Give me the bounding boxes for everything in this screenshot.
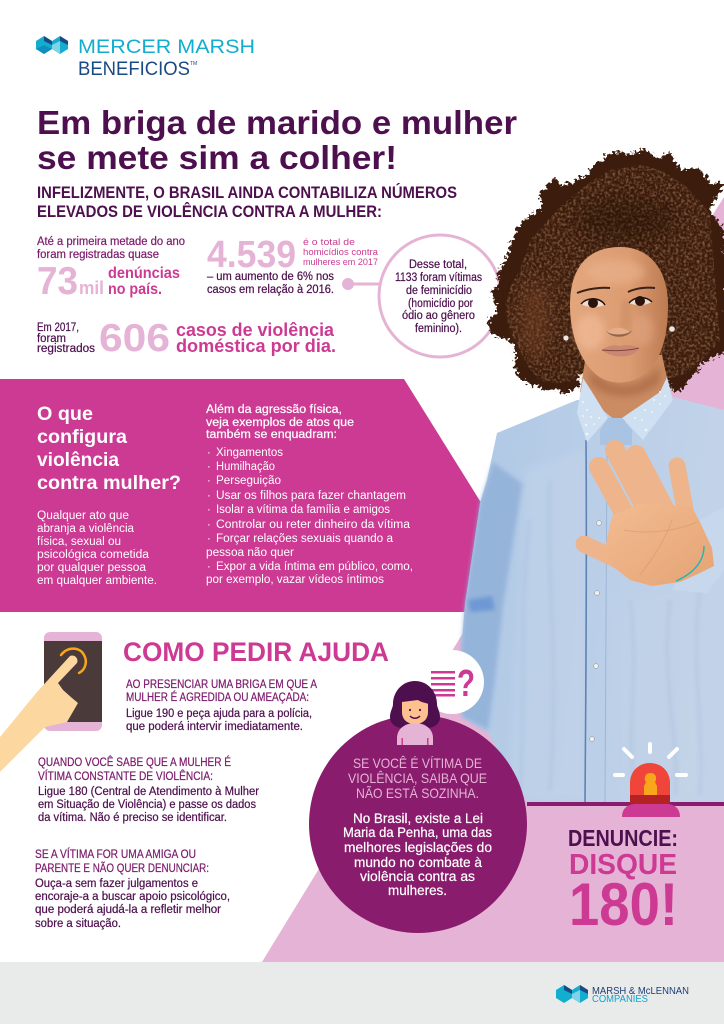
earrings [669, 326, 675, 332]
stat: 73 mil denuncias: mil [79, 278, 104, 298]
band list of abusive acts: · [207, 561, 211, 573]
help block: constant victim: VÍTIMA CONSTANTE DE VIOLÊNCIA: [38, 770, 213, 783]
stat: 4.539 homicidios: homicídios contra [303, 247, 379, 258]
purple circle panel: you are not alone: No Brasil, existe a Lei [353, 811, 483, 826]
band list of abusive acts [206, 447, 413, 586]
band list of abusive acts: pessoa não quer [206, 547, 294, 559]
purple circle panel: you are not alone: NÃO ESTÁ SOZINHA. [356, 785, 479, 801]
speech bubble with question mark [420, 650, 484, 714]
stat: 4.539 homicidios: é o total de [303, 237, 355, 248]
band list of abusive acts: Humilhação [216, 461, 275, 473]
stat: 4.539 homicidios [207, 234, 379, 296]
band list of abusive acts: · [207, 490, 211, 502]
band paragraph: abranja a violência [37, 523, 135, 535]
band list of abusive acts: · [207, 504, 211, 516]
band heading: O que configura violencia: contra mulher? [37, 472, 181, 494]
help block: constant victim: da vítima. Não é preciso se identificar. [38, 812, 227, 824]
band list intro: veja exemplos de atos que [206, 417, 354, 429]
stat: 4.539 homicidios: mulheres em 2017 [303, 257, 378, 268]
help block: friend or relative: sobre a situação. [35, 918, 121, 930]
help block: constant victim: Ligue 180 (Central de Atendimento à Mulher [38, 786, 259, 798]
logo: Mercer Marsh Beneficios [36, 36, 255, 80]
photo: woman making stop gesture [461, 149, 724, 802]
band list intro: também se enquadram: [206, 429, 337, 441]
help block: constant victim [38, 756, 259, 824]
call to action: denuncie disque 180: 180! [569, 871, 678, 938]
band list of abusive acts: Forçar relações sexuais quando a [216, 533, 394, 545]
stat: 73 mil denuncias: no país. [108, 281, 162, 298]
band list intro: Além da agressão física, [206, 404, 342, 416]
raised sleeve [672, 582, 704, 592]
siren icon [615, 744, 686, 817]
stat: 4.539 homicidios: – um aumento de 6% nos [207, 271, 334, 283]
help block: friend or relative: encoraje-a a buscar apoio psicológico, [35, 891, 230, 903]
help block: friend or relative [35, 848, 230, 930]
pink triangle behind woman's head [640, 197, 724, 410]
stat: 4.539 homicidios: casos em relação à 2016. [207, 284, 334, 296]
footer logo: Marsh & McLennan Companies [556, 985, 689, 1005]
stat: 606 casos: 606 [99, 317, 170, 360]
call to action: denuncie disque 180 [568, 825, 678, 938]
eyes [581, 296, 652, 308]
callout circle: feminicidio: ódio ao gênero [402, 310, 475, 322]
callout circle: feminicidio: de feminicídio [406, 285, 472, 297]
collar [577, 377, 673, 445]
call to action: denuncie disque 180: DISQUE [569, 849, 677, 881]
callout circle: feminicidio: (homicídio por [408, 298, 473, 310]
band list of abusive acts: Xingamentos [216, 447, 283, 459]
subtitle [37, 183, 457, 221]
band list of abusive acts: Isolar a vítima da família e amigos [216, 504, 390, 516]
stat: 73 mil denuncias: 73 [37, 260, 78, 303]
heading: como pedir ajuda: COMO PEDIR AJUDA [123, 637, 389, 667]
help block: constant victim: em Situação de Violência) e passe os dados [38, 799, 256, 811]
logo: Mercer Marsh Beneficios: MERCER MARSH [78, 37, 255, 58]
subtitle: ELEVADOS DE VIOLÊNCIA CONTRA A MULHER: [37, 202, 382, 221]
callout circle: feminicidio: feminino). [415, 323, 462, 335]
stat: 73 mil denuncias: foram registradas quase [37, 249, 159, 261]
logo: Mercer Marsh Beneficios: BENEFICIOS [78, 58, 190, 80]
band paragraph: Qualquer ato que [37, 510, 129, 522]
phone icon with pointing hand [0, 632, 102, 772]
purple circle panel: you are not alone: Maria da Penha, uma das [343, 825, 492, 840]
footer logo: Marsh & McLennan Companies: COMPANIES [592, 994, 648, 1005]
band list of abusive acts: · [207, 461, 211, 473]
footer logo: Marsh & McLennan Companies: MARSH & McLENNAN [592, 986, 689, 997]
band paragraph: em qualquer ambiente. [37, 575, 157, 587]
eyebrows [577, 288, 655, 293]
band heading: O que configura violencia: O que [37, 403, 93, 425]
band list of abusive acts: · [207, 519, 211, 531]
purple circle panel: you are not alone: VIOLÊNCIA, SAIBA QUE [348, 770, 487, 786]
band heading: O que configura violencia: violência [37, 449, 119, 471]
speech bubble with question mark: ? [457, 663, 475, 705]
purple circle panel: you are not alone: violência contra as [360, 869, 475, 884]
stat: 73 mil denuncias: Até a primeira metade do ano [37, 236, 185, 248]
help block: friend or relative: que poderá ajudá-la a refletir melhor [35, 904, 221, 916]
purple circle panel: you are not alone: mulheres. [388, 883, 447, 898]
neck [580, 355, 673, 424]
callout circle: feminicidio [379, 235, 501, 357]
title [37, 105, 517, 177]
shirt [461, 397, 724, 802]
magenta band: what is violence [0, 379, 490, 612]
help block: witnessing a fight: AO PRESENCIAR UMA BRIGA EM QUE A [126, 679, 317, 691]
band list of abusive acts: · [207, 447, 211, 459]
band list of abusive acts: · [207, 533, 211, 545]
help block: friend or relative: SE A VÍTIMA FOR UMA AMIGA OU [35, 848, 196, 861]
stat: 606 casos: foram [37, 333, 66, 345]
stat: 606 casos: casos de violência [176, 319, 335, 340]
band list of abusive acts: Usar os filhos para fazer chantagem [216, 490, 406, 502]
stat: 73 mil denuncias: denúncias [108, 265, 180, 282]
subtitle: INFELIZMENTE, O BRASIL AINDA CONTABILIZA NÚMEROS [37, 183, 457, 202]
band list of abusive acts: · [207, 475, 211, 487]
callout circle: feminicidio: 1133 foram vítimas [395, 272, 482, 284]
purple circle panel: you are not alone [309, 715, 527, 933]
title: se mete sim a colher! [37, 140, 397, 177]
purple circle panel: you are not alone: SE VOCÊ É VÍTIMA DE [353, 755, 482, 771]
help block: friend or relative: Ouça-a sem fazer julgamentos e [35, 878, 198, 890]
lips [602, 345, 639, 357]
hand [584, 450, 714, 586]
stat: 606 casos: doméstica por dia. [176, 335, 336, 356]
stat: 606 casos: registrados [37, 343, 95, 355]
divider bar above report panel [527, 802, 724, 806]
stat: 73 mil denuncias [37, 236, 185, 303]
band paragraph [37, 510, 157, 587]
callout circle: feminicidio: Desse total, [409, 259, 467, 271]
band paragraph: por qualquer pessoa [37, 562, 147, 574]
band paragraph: psicológica cometida [37, 549, 150, 561]
band paragraph: física, sexual ou [37, 536, 121, 548]
title: Em briga de marido e mulher [37, 105, 517, 142]
band heading: O que configura violencia [37, 403, 181, 494]
band list of abusive acts: Perseguição [216, 475, 281, 487]
help block: witnessing a fight [126, 679, 317, 733]
stat: 4.539 homicidios: 4.539 [207, 234, 296, 276]
purple circle panel: you are not alone: melhores legislações do [344, 840, 492, 855]
help block: witnessing a fight: MULHER É AGREDIDA OU AMEAÇADA: [126, 691, 309, 704]
help block: witnessing a fight: que poderá intervir imediatamente. [126, 721, 303, 733]
help block: witnessing a fight: Ligue 190 e peça ajuda para a polícia, [126, 708, 312, 720]
band list of abusive acts: Controlar ou reter dinheiro da vítima [216, 519, 411, 531]
band list intro [206, 404, 354, 441]
stat: 606 casos [37, 317, 336, 360]
help block: constant victim: QUANDO VOCÊ SABE QUE A MULHER É [38, 756, 231, 769]
band list of abusive acts: Expor a vida íntima em público, como, [216, 561, 413, 573]
stat: 606 casos: Em 2017, [37, 322, 79, 334]
logo: Mercer Marsh Beneficios: TM [190, 61, 197, 67]
band heading: O que configura violencia: configura [37, 426, 127, 448]
face [563, 247, 675, 383]
icon: woman avatar [390, 681, 440, 745]
band list of abusive acts: por exemplo, vazar vídeos íntimos [206, 574, 384, 586]
connector dot and line [342, 278, 380, 290]
call to action: denuncie disque 180: DENUNCIE: [568, 825, 678, 851]
hair [489, 149, 724, 393]
footer strip [0, 962, 724, 1024]
lower pink panel [262, 628, 724, 962]
help block: friend or relative: PARENTE E NÃO QUER DENUNCIAR: [35, 862, 209, 875]
purple circle panel: you are not alone: mundo no combate à [354, 855, 482, 870]
